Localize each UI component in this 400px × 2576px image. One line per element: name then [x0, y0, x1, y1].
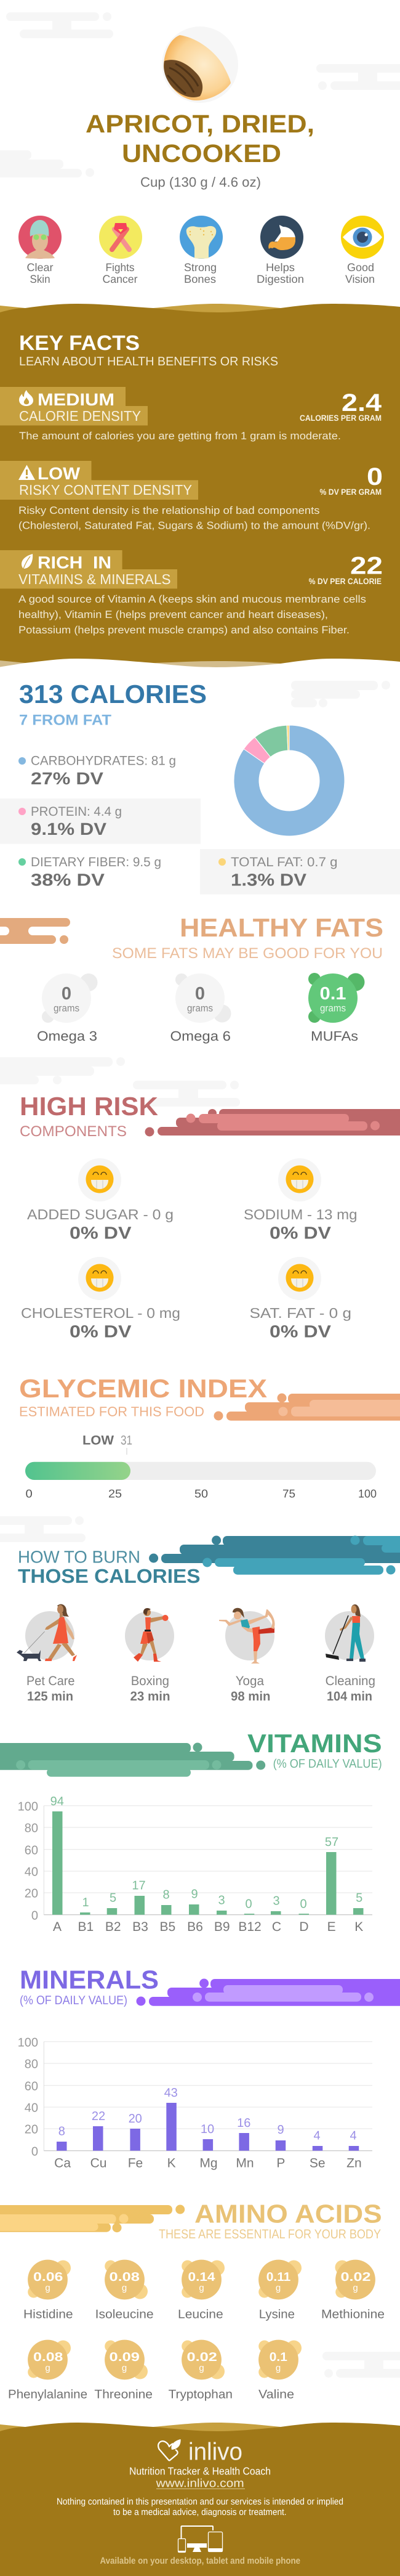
macro: carbohydrates: 27% DV [31, 769, 103, 788]
activity: cleaning: 104 min [327, 1689, 372, 1704]
bar chart: vitamins: 9 [191, 1888, 198, 1901]
fact: risky content density: % DV PER GRAM [320, 487, 382, 497]
title [86, 110, 314, 168]
bar chart: vitamins: B2 [105, 1920, 121, 1934]
gauge label: 31 [121, 1434, 132, 1448]
benefit: good vision: Vision [345, 273, 375, 285]
disclaimer: Nothing contained in this presentation and our services is intended or implied [57, 2497, 343, 2507]
heading: amino acids: AMINO ACIDS [194, 2200, 382, 2229]
bar chart: minerals: 80 [25, 2058, 38, 2071]
stat: cholesterol [21, 1257, 180, 1341]
bar chart: vitamins: B3 [132, 1920, 148, 1934]
bar chart: minerals: 20 [129, 2112, 142, 2126]
heading: high risk: HIGH RISK [20, 1092, 158, 1121]
fact: calorie density [0, 387, 382, 442]
amino: methionine: 0.02 [341, 2270, 370, 2284]
stat: mufas: MUFAs [311, 1028, 358, 1044]
stat: omega 3: grams [54, 1004, 79, 1014]
amino: threonine: 0.09 [110, 2350, 140, 2364]
activity: yoga: 98 min [231, 1689, 271, 1704]
bar chart: minerals: 60 [25, 2079, 38, 2093]
heading: vitamins: VITAMINS [247, 1729, 382, 1758]
disclaimer: to be a medical advice, diagnosis or treatment. [113, 2507, 287, 2517]
bar chart: vitamins: B1 [78, 1920, 94, 1934]
bar chart: vitamins: B9 [214, 1920, 230, 1934]
stat: omega 6 [170, 973, 231, 1044]
amino: isoleucine [95, 2260, 154, 2322]
gauge label [82, 1434, 132, 1455]
amino: threonine: g [122, 2363, 127, 2373]
amino: valine: 0.1 [270, 2350, 287, 2364]
benefit: helps digestion [257, 216, 304, 285]
stat: added sugar: 0% DV [70, 1224, 132, 1243]
bar chart: vitamins: 94 [50, 1795, 64, 1808]
macro: carbohydrates: CARBOHYDRATES: 81 g [31, 754, 176, 768]
macro: carbohydrates [18, 754, 176, 788]
serving size: Cup (130 g / 4.6 oz) [140, 174, 261, 190]
activity: yoga [219, 1608, 275, 1704]
stat: saturated fat [250, 1257, 351, 1341]
benefit: fights cancer [99, 216, 142, 285]
activity: cleaning [325, 1604, 375, 1704]
amino: histidine: g [45, 2283, 50, 2293]
macro: protein: 9.1% DV [31, 819, 106, 839]
stat: omega 3: 0 [62, 984, 71, 1004]
bar chart: vitamins: 5 [356, 1891, 362, 1905]
panel: glycemic index [19, 1374, 400, 1500]
bar chart: minerals: 9 [277, 2123, 284, 2137]
banner: glycemic [214, 1394, 400, 1421]
fact: vitamins and minerals: A good source of Vitamin A (keeps skin and mucous membrane cells [18, 593, 366, 605]
benefit: clear skin: Clear [27, 261, 54, 274]
banner: burn [149, 1535, 400, 1575]
gauge scale: 25 [108, 1487, 122, 1500]
fact: calorie density: MEDIUM [38, 390, 114, 409]
stat: omega 6: 0 [195, 984, 205, 1004]
amino: leucine: Leucine [178, 2308, 223, 2322]
panel: footer [0, 2423, 400, 2576]
macro: dietary fiber: 38% DV [31, 871, 105, 890]
amino: tryptophan: g [199, 2363, 204, 2373]
panel: vitamins [0, 1729, 382, 1934]
bar chart: minerals: 4 [350, 2129, 357, 2143]
banner: healthy fats [0, 918, 70, 944]
fact: risky content density: RISKY CONTENT DENSITY [19, 482, 192, 498]
bar chart: minerals: Ca [54, 2156, 71, 2170]
heading: those calories: THOSE CALORIES [18, 1565, 201, 1587]
bar chart: minerals: 20 [25, 2123, 38, 2137]
title: UNCOOKED [122, 139, 281, 168]
activity: boxing: Boxing [131, 1674, 169, 1688]
panel: calories [0, 680, 400, 895]
macro: total fat: TOTAL FAT: 0.7 g [231, 855, 337, 869]
bar chart: vitamins: 3 [273, 1895, 280, 1908]
banner: minerals [137, 1979, 400, 2006]
subheading: percent of daily value: (% OF DAILY VALUE) [273, 1757, 382, 1771]
bar chart: minerals: P [276, 2156, 285, 2170]
panel: key facts [0, 304, 400, 667]
bar chart: minerals: Fe [128, 2156, 143, 2170]
amino: lysine: 0.11 [266, 2270, 290, 2284]
logo: inlivo: inlivo [188, 2439, 242, 2466]
bar chart: vitamins: 5 [110, 1891, 116, 1905]
gauge scale: 75 [282, 1487, 295, 1500]
subheading: from fat: 7 FROM FAT [19, 712, 111, 729]
banner: amino acids [0, 2204, 185, 2232]
panel: high risk components [20, 1092, 400, 1341]
fact: calorie density: CALORIES PER GRAM [300, 413, 382, 423]
amino: phenylalanine [8, 2340, 87, 2402]
bar chart: minerals: Mn [236, 2156, 254, 2170]
amino: valine [258, 2340, 302, 2402]
stat: saturated fat: 0% DV [270, 1322, 331, 1341]
fact: vitamins and minerals [0, 550, 383, 636]
stat: mufas [308, 973, 364, 1044]
bar chart: minerals: 100 [18, 2036, 38, 2049]
bar chart: minerals: Cu [90, 2156, 106, 2170]
amino: methionine [321, 2260, 385, 2322]
benefit: helps digestion: Helps [266, 261, 295, 274]
subheading: key facts: LEARN ABOUT HEALTH BENEFITS OR RISKS [19, 355, 278, 368]
gauge scale: 100 [358, 1487, 377, 1500]
heading: healthy fats: HEALTHY FATS [180, 913, 383, 942]
subheading: components: COMPONENTS [20, 1123, 127, 1140]
stat: mufas: grams [320, 1004, 346, 1014]
amino: phenylalanine: g [45, 2363, 50, 2373]
stat: sodium: 0% DV [270, 1224, 331, 1243]
stat: omega 6: Omega 6 [170, 1028, 231, 1044]
panel: amino acids [0, 2200, 385, 2402]
fact: risky content density: LOW [38, 464, 81, 483]
amino: leucine [178, 2260, 225, 2322]
macro: total fat [200, 849, 400, 895]
bar chart: vitamins: 8 [162, 1888, 170, 1902]
logo: inlivo [158, 2439, 242, 2466]
amino: phenylalanine: 0.08 [33, 2350, 63, 2364]
title: APRICOT, DRIED, [86, 110, 314, 138]
bar chart: vitamins: D [299, 1920, 309, 1934]
donut chart [234, 725, 345, 836]
panel: burn calories [17, 1535, 400, 1704]
bar chart: vitamins: 20 [25, 1887, 38, 1901]
amino: tryptophan: Tryptophan [169, 2388, 233, 2402]
stat: added sugar: ADDED SUGAR - 0 g [27, 1206, 174, 1222]
amino: phenylalanine: Phenylalanine [8, 2388, 87, 2402]
subheading: minerals percent of daily value: (% OF DAILY VALUE) [20, 1994, 127, 2007]
activity: cleaning: Cleaning [326, 1674, 375, 1688]
amino: lysine: g [276, 2283, 281, 2293]
heading: key facts: KEY FACTS [19, 331, 140, 355]
amino: tryptophan: 0.02 [187, 2350, 217, 2364]
fact: calorie density: The amount of calories you are getting from 1 gram is moderate. [19, 430, 341, 442]
bar chart: minerals: Mg [199, 2156, 218, 2170]
amino: isoleucine: Isoleucine [95, 2308, 154, 2322]
activity: boxing [125, 1608, 174, 1704]
bar chart: minerals: 4 [313, 2129, 321, 2143]
bar chart: vitamins: 57 [325, 1835, 338, 1849]
stat: omega 3: Omega 3 [37, 1028, 97, 1044]
bar chart: vitamins: A [53, 1920, 62, 1934]
bar chart: vitamins: K [354, 1920, 363, 1934]
macro: dietary fiber [18, 855, 161, 890]
bar chart: vitamins: 3 [218, 1894, 225, 1908]
fact: vitamins and minerals: healthy), Vitamin E (helps prevent cancer and heart diseases), [18, 609, 328, 620]
stat: omega 6: grams [187, 1004, 213, 1014]
gauge label: LOW [82, 1434, 114, 1448]
benefit: clear skin [18, 216, 62, 285]
bar chart: minerals: 16 [237, 2116, 250, 2130]
fact: calorie density: CALORIE DENSITY [19, 408, 141, 424]
amino: isoleucine: g [122, 2283, 127, 2293]
benefit: good vision [341, 216, 384, 285]
bar chart: vitamins: 60 [25, 1843, 38, 1857]
heading: minerals: MINERALS [20, 1965, 159, 1994]
bar chart: vitamins: B12 [238, 1920, 262, 1934]
stat: mufas: 0.1 [320, 984, 346, 1004]
activity: boxing: 23 min [130, 1689, 170, 1704]
stat: sodium: SODIUM - 13 mg [244, 1206, 357, 1222]
macro: protein: PROTEIN: 4.4 g [31, 805, 122, 819]
amino: leucine: g [199, 2283, 204, 2293]
bar chart: vitamins: E [327, 1920, 336, 1934]
bar chart: minerals [18, 2036, 372, 2170]
panel: header [18, 26, 384, 285]
fact: risky content density: (Cholesterol, Saturated Fat, Sugars & Sodium) to the amount (%DV/gr). [18, 520, 370, 532]
fact: vitamins and minerals: Potassium (helps prevent muscle cramps) and also contains Fiber. [18, 624, 350, 636]
gauge bar [25, 1462, 376, 1480]
stat: added sugar [27, 1158, 174, 1243]
amino: methionine: Methionine [321, 2308, 385, 2322]
amino: histidine [23, 2260, 73, 2322]
availability note: Available on your desktop, tablet and mobile phone [100, 2556, 300, 2566]
amino: valine: g [276, 2363, 281, 2373]
bar chart: minerals: 40 [25, 2102, 38, 2115]
fact: vitamins and minerals: RICH IN [38, 553, 111, 572]
macro: protein [0, 798, 201, 844]
stat: cholesterol: CHOLESTEROL - 0 mg [21, 1305, 180, 1321]
bar chart: minerals: 0 [31, 2145, 38, 2158]
benefit: fights cancer: Fights [106, 261, 134, 274]
stat: cholesterol: 0% DV [70, 1322, 132, 1341]
bar chart: vitamins: 1 [82, 1896, 89, 1909]
heading: glycemic index: GLYCEMIC INDEX [19, 1374, 267, 1403]
amino: histidine: 0.06 [33, 2270, 63, 2284]
banner: high risk [145, 1109, 400, 1136]
fact: risky content density: Risky Content density is the relationship of bad components [18, 505, 320, 516]
bar chart: vitamins: 17 [132, 1879, 146, 1893]
amino: histidine: Histidine [23, 2308, 73, 2322]
bar chart: vitamins [18, 1795, 372, 1934]
bar chart: minerals: 10 [201, 2123, 214, 2136]
bar chart: vitamins: 80 [25, 1822, 38, 1835]
macro: total fat: 1.3% DV [231, 871, 306, 890]
bar chart: minerals: 22 [92, 2110, 105, 2123]
fact: vitamins and minerals: % DV PER CALORIE [309, 577, 382, 586]
amino: threonine: Threonine [94, 2388, 153, 2402]
bar chart: vitamins: 0 [31, 1909, 38, 1922]
benefit: helps digestion: Digestion [257, 273, 304, 285]
fact: risky content density: 0 [367, 463, 383, 490]
bar chart: vitamins: B5 [160, 1920, 175, 1934]
benefit: good vision: Good [347, 261, 374, 274]
amino: leucine: 0.14 [188, 2270, 215, 2284]
bar chart: minerals: Zn [346, 2156, 362, 2170]
panel: healthy fats [0, 913, 383, 1044]
benefit: strong bones: Strong [184, 261, 217, 274]
activity: yoga: Yoga [236, 1674, 264, 1688]
bar chart: vitamins: 40 [25, 1866, 38, 1879]
banner: vitamins [0, 1742, 265, 1777]
benefit: strong bones: Bones [184, 273, 216, 285]
icon: devices [178, 2526, 223, 2553]
subheading: glycemic index: ESTIMATED FOR THIS FOOD [19, 1404, 204, 1420]
bar chart: vitamins: B6 [187, 1920, 203, 1934]
activity: pet care: Pet Care [26, 1674, 75, 1688]
bar chart: vitamins: 100 [18, 1800, 38, 1813]
activity: pet care [17, 1604, 77, 1704]
fact: calorie density: 2.4 [342, 389, 382, 416]
bar chart: minerals: 8 [58, 2125, 65, 2139]
bar chart: minerals: 43 [164, 2086, 178, 2100]
gauge scale: 50 [194, 1487, 208, 1500]
amino: lysine: Lysine [259, 2308, 295, 2322]
gauge scale: 0 [26, 1487, 33, 1500]
heading: how to burn: HOW TO BURN [18, 1548, 140, 1567]
bar chart: vitamins: C [272, 1920, 281, 1934]
fact: vitamins and minerals: 22 [350, 553, 383, 580]
bar chart: minerals: Se [310, 2156, 326, 2170]
tagline: Nutrition Tracker & Health Coach [129, 2466, 271, 2477]
activity: pet care: 125 min [27, 1689, 73, 1704]
fact: vitamins and minerals: VITAMINS & MINERALS [18, 571, 171, 587]
bar chart: vitamins: 0 [300, 1898, 307, 1911]
website link: www.inlivo.com [156, 2477, 244, 2490]
benefit: fights cancer: Cancer [102, 273, 138, 285]
disclaimer [57, 2497, 343, 2517]
benefit: strong bones [180, 216, 223, 285]
gauge scale [26, 1487, 377, 1500]
stat: saturated fat: SAT. FAT - 0 g [250, 1305, 351, 1321]
fact: risky content density [0, 461, 383, 532]
amino: lysine [258, 2260, 302, 2322]
amino: threonine [94, 2340, 153, 2402]
subheading: healthy fats: SOME FATS MAY BE GOOD FOR YOU [112, 945, 383, 962]
stat: omega 3 [37, 973, 97, 1044]
benefit: clear skin: Skin [30, 273, 50, 285]
panel: minerals [18, 1965, 400, 2170]
amino: methionine: g [353, 2283, 358, 2293]
heading: calories: 313 CALORIES [19, 680, 207, 709]
icon: dried apricot [162, 26, 238, 103]
stat: sodium [244, 1158, 357, 1243]
bar chart: vitamins: 0 [245, 1898, 252, 1911]
bar chart: minerals: K [167, 2156, 176, 2170]
amino: isoleucine: 0.08 [110, 2270, 140, 2284]
amino: valine: Valine [258, 2388, 294, 2402]
macro: dietary fiber: DIETARY FIBER: 9.5 g [31, 855, 161, 869]
amino: tryptophan [169, 2340, 233, 2402]
